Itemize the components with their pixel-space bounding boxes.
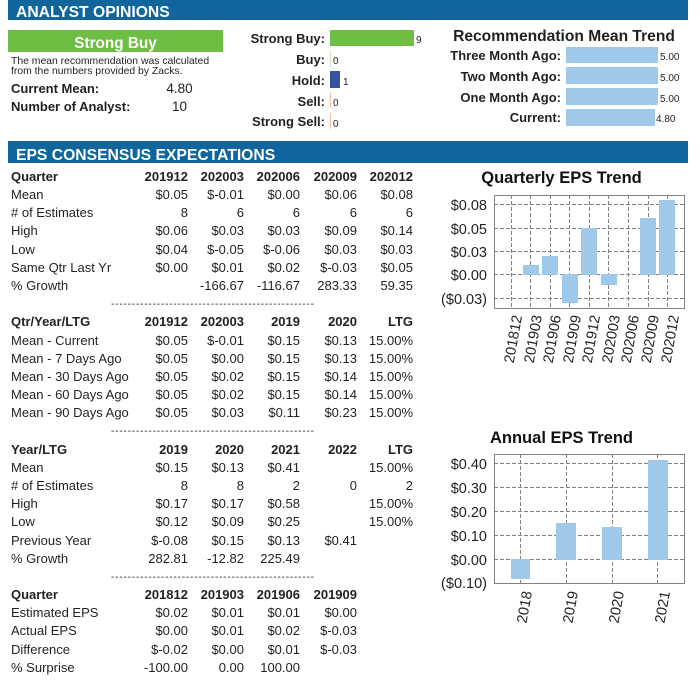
chart: quarterly EPS trend: 201912 — [580, 314, 604, 364]
table: annual consensus: Year/LTG — [11, 442, 67, 457]
table: estimate revisions: $0.14 — [324, 369, 357, 384]
table: annual consensus: 2 — [293, 478, 300, 493]
table: quarterly consensus: 6 — [350, 205, 357, 220]
chart: quarterly EPS trend: $0.05 — [451, 222, 487, 238]
table: annual consensus: 15.00% — [369, 460, 413, 475]
table: quarterly consensus: $0.01 — [211, 260, 244, 275]
divider dashes: ------------------------------------------------- — [111, 299, 314, 310]
table: estimate revisions: $0.02 — [211, 387, 244, 402]
table: earnings surprise: Estimated EPS — [11, 605, 99, 620]
chart: annual EPS trend: $0.00 — [451, 553, 487, 569]
table: quarterly consensus: # of Estimates — [11, 205, 94, 220]
table: estimate revisions: Mean - 60 Days Ago — [11, 387, 129, 402]
table: annual consensus: -12.82 — [207, 551, 244, 566]
table: estimate revisions: $0.15 — [267, 387, 300, 402]
table: earnings surprise: $0.02 — [155, 605, 188, 620]
table: quarterly consensus: $0.08 — [380, 187, 413, 202]
divider dashes: ------------------------------------------------- — [111, 426, 314, 437]
table: annual consensus: 225.49 — [260, 551, 300, 566]
chart: recommendation distribution: 0 — [333, 56, 339, 67]
table: annual consensus: 8 — [181, 478, 188, 493]
chart: annual EPS trend: $0.10 — [451, 529, 487, 545]
table: quarterly consensus: High — [11, 223, 38, 238]
table: annual consensus: $0.17 — [155, 496, 188, 511]
table: earnings surprise: 201812 — [145, 587, 188, 602]
table: annual consensus: LTG — [388, 442, 413, 457]
table: earnings surprise: $-0.03 — [320, 642, 357, 657]
chart: recommendation distribution: Hold: — [292, 73, 325, 88]
table: annual consensus: $0.25 — [267, 514, 300, 529]
table: quarterly consensus: $0.05 — [380, 260, 413, 275]
table: earnings surprise: $0.01 — [211, 605, 244, 620]
chart: annual EPS trend: $0.30 — [451, 481, 487, 497]
table: estimate revisions: $0.13 — [324, 351, 357, 366]
chart: annual EPS trend: ($0.10) — [441, 576, 487, 592]
table: quarterly consensus: 202003 — [201, 169, 244, 184]
chart: quarterly EPS trend: $0.00 — [451, 268, 487, 284]
chart: quarterly EPS trend: 201812 — [502, 314, 526, 364]
chart: annual EPS trend: Annual EPS Trend — [490, 429, 633, 447]
chart: recommendation mean trend: Current: — [510, 110, 561, 125]
table: estimate revisions: 201912 — [145, 314, 188, 329]
table: quarterly consensus: Mean — [11, 187, 44, 202]
table: earnings surprise — [11, 587, 357, 675]
table: annual consensus: $0.13 — [267, 533, 300, 548]
table: quarterly consensus: $0.02 — [267, 260, 300, 275]
table: estimate revisions: LTG — [388, 314, 413, 329]
chart: quarterly EPS trend: 202012 — [659, 314, 683, 364]
table: annual consensus: $0.17 — [211, 496, 244, 511]
table: annual consensus: % Growth — [11, 551, 68, 566]
table: annual consensus — [11, 442, 413, 566]
table: estimate revisions: $0.15 — [267, 333, 300, 348]
table: annual consensus: 2022 — [328, 442, 357, 457]
table: earnings surprise: Difference — [11, 642, 70, 657]
chart: recommendation mean trend: 5.00 — [660, 94, 680, 105]
chart: quarterly EPS trend — [441, 169, 685, 364]
table: earnings surprise: 201909 — [314, 587, 357, 602]
table: estimate revisions: $0.23 — [324, 405, 357, 420]
table: estimate revisions: 2020 — [328, 314, 357, 329]
chart: recommendation distribution: Strong Buy: — [251, 31, 325, 46]
table: estimate revisions — [11, 314, 413, 420]
table: estimate revisions: $-0.01 — [207, 333, 244, 348]
table: estimate revisions: $0.11 — [268, 405, 300, 420]
chart: quarterly EPS trend: 202006 — [619, 314, 643, 364]
table: quarterly consensus: $0.04 — [155, 242, 188, 257]
table: earnings surprise: $-0.02 — [151, 642, 188, 657]
table: annual consensus: 8 — [237, 478, 244, 493]
table: quarterly consensus: $0.14 — [380, 223, 413, 238]
table: annual consensus: 2019 — [159, 442, 188, 457]
current mean — [11, 81, 193, 96]
table: quarterly consensus: $-0.01 — [207, 187, 244, 202]
panel: analyst opinions header: ANALYST OPINIONS — [16, 4, 170, 21]
current mean: 4.80 — [166, 81, 193, 96]
chart: quarterly EPS trend: 202009 — [639, 314, 663, 364]
chart: annual EPS trend — [441, 429, 685, 624]
table: quarterly consensus: $0.09 — [324, 223, 357, 238]
table: quarterly consensus: $0.03 — [380, 242, 413, 257]
table: quarterly consensus: 283.33 — [317, 278, 357, 293]
table: estimate revisions: $0.14 — [324, 387, 357, 402]
panel: analyst opinions header — [8, 0, 688, 21]
chart: recommendation mean trend: 5.00 — [660, 73, 680, 84]
table: quarterly consensus: -116.67 — [257, 278, 300, 293]
table: annual consensus: 0 — [350, 478, 357, 493]
table: earnings surprise: $0.01 — [267, 642, 300, 657]
table: earnings surprise: 201903 — [201, 587, 244, 602]
table: annual consensus: $0.15 — [155, 460, 188, 475]
table: annual consensus: $0.12 — [155, 514, 188, 529]
table: annual consensus: Previous Year — [11, 533, 92, 548]
table: earnings surprise: % Surprise — [11, 660, 75, 675]
table: quarterly consensus: 202012 — [370, 169, 413, 184]
table: estimate revisions: $0.15 — [267, 351, 300, 366]
table: quarterly consensus: 6 — [293, 205, 300, 220]
explanatory note: from the numbers provided by Zacks. — [11, 66, 183, 77]
table: estimate revisions: 15.00% — [369, 405, 413, 420]
number of analysts: Number of Analyst: — [11, 99, 130, 114]
table: earnings surprise: 201906 — [257, 587, 300, 602]
chart: annual EPS trend: 2019 — [561, 590, 582, 624]
chart: quarterly EPS trend: $0.03 — [451, 245, 487, 261]
table: estimate revisions: Qtr/Year/LTG — [11, 314, 90, 329]
table: annual consensus: $0.15 — [211, 533, 244, 548]
table: quarterly consensus: Quarter — [11, 169, 58, 184]
table: annual consensus: $-0.08 — [151, 533, 188, 548]
table: annual consensus: 282.81 — [148, 551, 188, 566]
table: earnings surprise: $0.00 — [324, 605, 357, 620]
chart: quarterly EPS trend: 202003 — [600, 314, 624, 364]
table: quarterly consensus: $0.06 — [155, 223, 188, 238]
table: quarterly consensus: $-0.03 — [320, 260, 357, 275]
panel: eps consensus header: EPS CONSENSUS EXPECTATIONS — [16, 147, 275, 164]
table: quarterly consensus: $0.00 — [267, 187, 300, 202]
table: estimate revisions: $0.00 — [211, 351, 244, 366]
table: annual consensus: 15.00% — [369, 496, 413, 511]
chart: quarterly EPS trend: 201903 — [522, 314, 546, 364]
chart: recommendation distribution: 0 — [333, 119, 339, 130]
table: annual consensus: 2 — [406, 478, 413, 493]
chart: annual EPS trend: 2020 — [607, 590, 628, 624]
table: estimate revisions: 15.00% — [369, 369, 413, 384]
table: earnings surprise: Quarter — [11, 587, 58, 602]
chart: recommendation distribution: Strong Sell: — [252, 114, 325, 129]
table: estimate revisions: Mean - 90 Days Ago — [11, 405, 129, 420]
table: estimate revisions: $0.02 — [211, 369, 244, 384]
chart: recommendation mean trend: 4.80 — [656, 114, 676, 125]
explanatory note — [11, 56, 209, 77]
table: earnings surprise: 100.00 — [260, 660, 300, 675]
table: estimate revisions: $0.05 — [155, 333, 188, 348]
panel: eps consensus header — [8, 141, 688, 164]
chart: recommendation distribution: 0 — [333, 98, 339, 109]
table: earnings surprise: $-0.03 — [320, 623, 357, 638]
table: earnings surprise: 0.00 — [219, 660, 244, 675]
chart: recommendation mean trend: Three Month Ago: — [450, 48, 561, 63]
table: estimate revisions: 15.00% — [369, 387, 413, 402]
table: earnings surprise: $0.00 — [211, 642, 244, 657]
chart: recommendation distribution — [251, 30, 422, 130]
panel: strong buy summary — [8, 30, 223, 114]
table: estimate revisions: 2019 — [271, 314, 300, 329]
table: quarterly consensus: 201912 — [145, 169, 188, 184]
table: estimate revisions: $0.05 — [155, 387, 188, 402]
table: quarterly consensus: 202009 — [314, 169, 357, 184]
chart: quarterly EPS trend: Quarterly EPS Trend — [481, 169, 642, 187]
table: annual consensus: $0.41 — [324, 533, 357, 548]
table: quarterly consensus: $-0.06 — [263, 242, 300, 257]
table: earnings surprise: $0.01 — [267, 605, 300, 620]
table: annual consensus: Mean — [11, 460, 44, 475]
table: estimate revisions: $0.05 — [155, 405, 188, 420]
table: annual consensus: $0.58 — [267, 496, 300, 511]
table: annual consensus: $0.41 — [267, 460, 300, 475]
explanatory note: The mean recommendation was calculated — [11, 56, 209, 67]
table: quarterly consensus: 6 — [406, 205, 413, 220]
table: estimate revisions: $0.13 — [324, 333, 357, 348]
table: estimate revisions: $0.15 — [267, 369, 300, 384]
table: quarterly consensus: $0.00 — [155, 260, 188, 275]
number of analysts: 10 — [172, 99, 187, 114]
table: quarterly consensus: 8 — [181, 205, 188, 220]
chart: annual EPS trend: $0.20 — [451, 505, 487, 521]
table: quarterly consensus: Low — [11, 242, 35, 257]
table: quarterly consensus: 202006 — [257, 169, 300, 184]
table: quarterly consensus: $0.03 — [211, 223, 244, 238]
chart: quarterly EPS trend: 201906 — [541, 314, 565, 364]
table: annual consensus: 2021 — [271, 442, 300, 457]
chart: recommendation distribution: 1 — [343, 77, 349, 88]
table: quarterly consensus: Same Qtr Last Yr — [11, 260, 112, 275]
chart: recommendation mean trend: 5.00 — [660, 52, 680, 63]
chart: recommendation distribution: Buy: — [296, 52, 325, 67]
chart: recommendation mean trend — [450, 28, 680, 126]
current mean: Current Mean: — [11, 81, 99, 96]
table: estimate revisions: 15.00% — [369, 351, 413, 366]
table: annual consensus: 2020 — [215, 442, 244, 457]
chart: annual EPS trend: 2021 — [653, 590, 674, 624]
table: earnings surprise: -100.00 — [144, 660, 188, 675]
table: quarterly consensus: % Growth — [11, 278, 68, 293]
chart: recommendation mean trend: Recommendation Mean Trend — [453, 28, 675, 45]
table: estimate revisions: $0.05 — [155, 369, 188, 384]
table: estimate revisions: Mean - 7 Days Ago — [11, 351, 122, 366]
table: quarterly consensus: $0.05 — [155, 187, 188, 202]
table: estimate revisions: $0.05 — [155, 351, 188, 366]
table: estimate revisions: $0.03 — [211, 405, 244, 420]
table: quarterly consensus: $0.03 — [324, 242, 357, 257]
table: annual consensus: 15.00% — [369, 514, 413, 529]
chart: quarterly EPS trend: 201909 — [561, 314, 585, 364]
chart: annual EPS trend: $0.40 — [451, 457, 487, 473]
rating banner — [8, 30, 223, 52]
table: quarterly consensus: $0.06 — [324, 187, 357, 202]
divider dashes: ------------------------------------------------- — [111, 572, 314, 583]
chart: recommendation mean trend: One Month Ago: — [460, 90, 561, 105]
table: quarterly consensus — [11, 169, 413, 293]
table: annual consensus: $0.13 — [211, 460, 244, 475]
chart: recommendation distribution: 9 — [416, 35, 422, 46]
table: quarterly consensus: 59.35 — [380, 278, 413, 293]
table: annual consensus: High — [11, 496, 38, 511]
table: quarterly consensus: $-0.05 — [207, 242, 244, 257]
table: annual consensus: # of Estimates — [11, 478, 94, 493]
chart: annual EPS trend: 2018 — [515, 590, 536, 624]
table: earnings surprise: $0.02 — [267, 623, 300, 638]
table: quarterly consensus: -166.67 — [200, 278, 244, 293]
number of analysts — [11, 99, 187, 114]
chart: quarterly EPS trend: $0.08 — [451, 198, 487, 214]
table: annual consensus: Low — [11, 514, 35, 529]
table: earnings surprise: $0.00 — [155, 623, 188, 638]
chart: recommendation distribution: Sell: — [298, 94, 325, 109]
table: estimate revisions: Mean - 30 Days Ago — [11, 369, 129, 384]
table: estimate revisions: 202003 — [201, 314, 244, 329]
chart: recommendation mean trend: Two Month Ago: — [461, 69, 561, 84]
table: annual consensus: $0.09 — [211, 514, 244, 529]
table: quarterly consensus: $0.03 — [267, 223, 300, 238]
chart: quarterly EPS trend: ($0.03) — [441, 292, 487, 308]
table: earnings surprise: $0.01 — [211, 623, 244, 638]
table: estimate revisions: Mean - Current — [11, 333, 99, 348]
table: quarterly consensus: 6 — [237, 205, 244, 220]
table: estimate revisions: 15.00% — [369, 333, 413, 348]
rating banner: Strong Buy — [74, 35, 157, 52]
table: earnings surprise: Actual EPS — [11, 623, 77, 638]
